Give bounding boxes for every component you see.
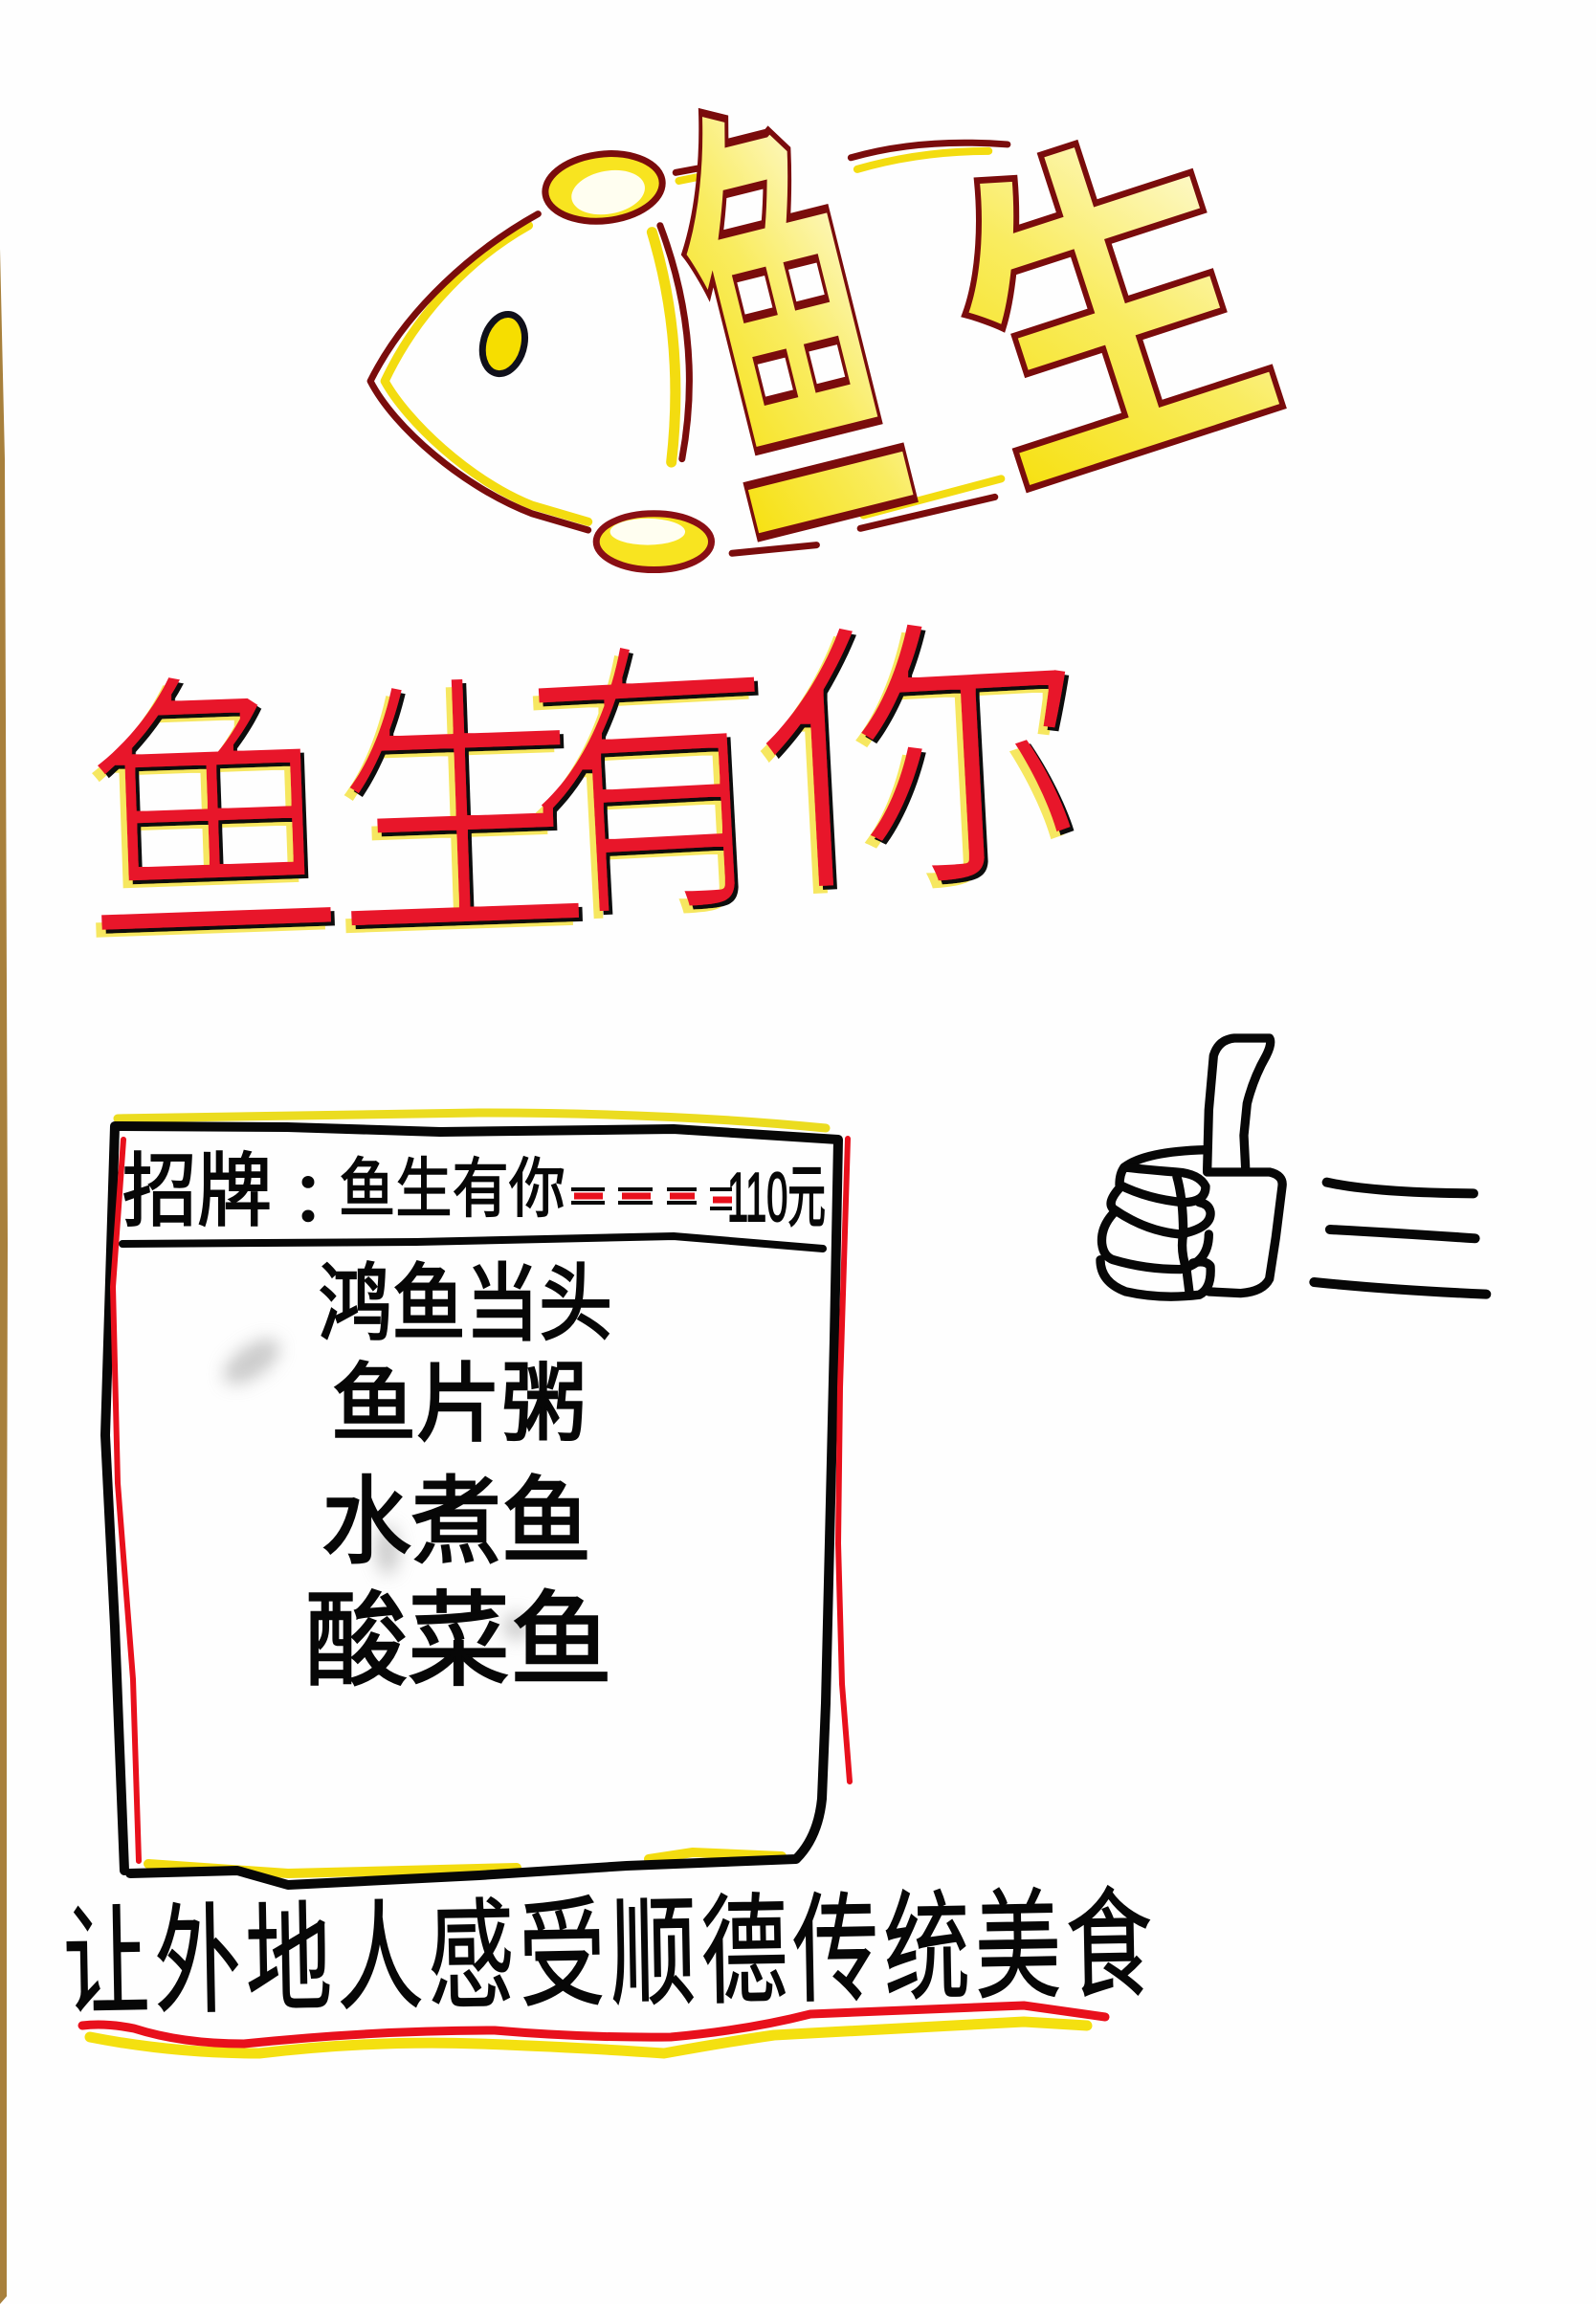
fish body yellow (385, 226, 588, 521)
三 glyph strokes beside thumb (1314, 1183, 1486, 1295)
finger one (1119, 1167, 1206, 1203)
colon: ： (291, 1160, 360, 1236)
dish name: 鱼生有你 (339, 1153, 565, 1226)
leader dashes (571, 1189, 732, 1208)
heading glyph 你: 你 (746, 592, 1097, 932)
red right stroke (838, 1139, 850, 1782)
top yellow stroke (118, 1113, 826, 1128)
item four: 酸菜鱼 (305, 1583, 612, 1698)
finger three (1101, 1213, 1208, 1270)
menu items (305, 1256, 612, 1698)
finger four (1100, 1260, 1210, 1296)
fish eye (478, 314, 529, 375)
heading glyph 生: 生 (323, 654, 599, 976)
bottom yellow stroke (148, 1852, 782, 1873)
title glyph 鱼: 鱼 (640, 60, 943, 612)
fish body ink (370, 214, 588, 530)
red underline (82, 2005, 1105, 2044)
title glyph 生: 生 (911, 87, 1312, 544)
lower tail line ink (860, 497, 995, 528)
black outline (105, 1126, 838, 1885)
slogan underline (82, 2005, 1105, 2053)
icon: thumbs up (1100, 1038, 1282, 1296)
paper left edge (0, 249, 8, 2304)
upper fin (523, 143, 684, 233)
item three: 水煮鱼 (321, 1469, 591, 1576)
hand top (1124, 1150, 1206, 1167)
gill arc yellow (652, 233, 676, 462)
top dash ink (676, 143, 1008, 172)
heading glyph 鱼: 鱼 (71, 649, 354, 986)
item one: 鸿鱼当头 (319, 1256, 612, 1351)
price: 110元 (727, 1160, 826, 1236)
heading 鱼生有你 (71, 592, 1097, 986)
heading glyph 有: 有 (515, 617, 788, 958)
palm (1208, 1172, 1282, 1294)
signature label: 招牌 (122, 1146, 272, 1236)
knuckle line (1177, 1177, 1189, 1295)
thumb (1208, 1038, 1271, 1170)
lower stub line (732, 545, 816, 553)
title: fish-shaped 鱼生 (370, 60, 1312, 612)
top dash yellow (679, 151, 988, 181)
slogan: 让外地人感受顺德传统美食 (62, 1878, 1153, 2029)
panel: menu box (105, 1113, 850, 1885)
upper fin highlight (557, 164, 659, 221)
header divider (122, 1236, 823, 1249)
lower tail line yellow (863, 478, 1001, 515)
red left stroke (113, 1140, 139, 1861)
finger two (1111, 1188, 1210, 1234)
lower fin (596, 514, 712, 570)
lower fin highlight (610, 519, 685, 545)
yellow underline (90, 2022, 1087, 2053)
box frame (105, 1113, 850, 1885)
menu header: signature dish and price (122, 1146, 826, 1236)
item two: 鱼片粥 (331, 1357, 587, 1452)
smudges (216, 1330, 530, 1640)
fish outline (370, 143, 1008, 570)
gill arc ink (660, 226, 689, 459)
